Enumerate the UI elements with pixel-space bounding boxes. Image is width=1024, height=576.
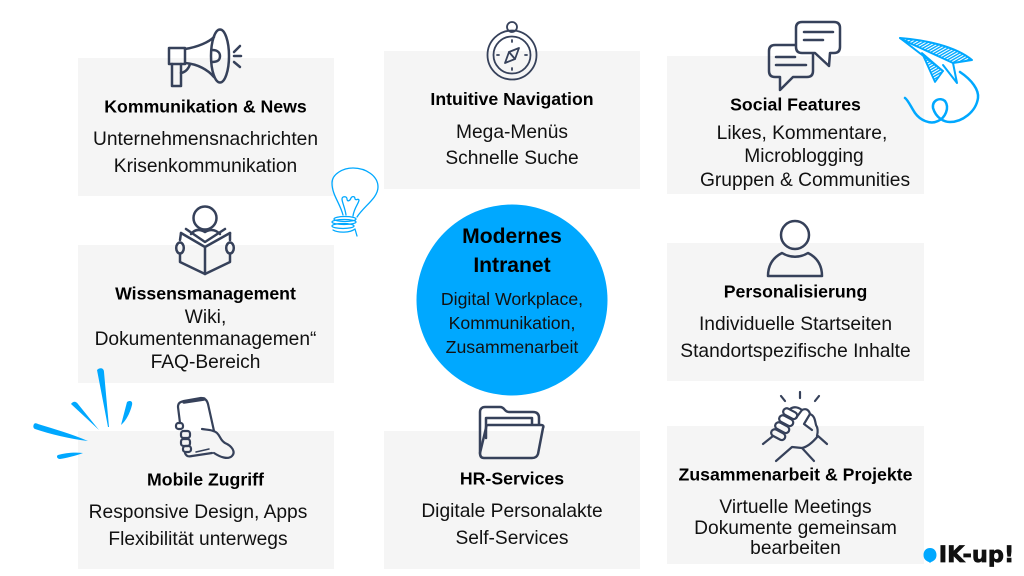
icon: handshake — [763, 392, 827, 461]
panel: Social Features — [667, 22, 924, 194]
panel: Personalisierung — [667, 221, 924, 381]
text block: Standortspezifische Inhalte — [680, 341, 911, 362]
heading: HR-Services — [460, 468, 564, 488]
heading: Intranet — [473, 254, 551, 277]
icon: paper plane doodle — [900, 38, 978, 122]
text block — [421, 501, 603, 549]
icon: person — [768, 221, 822, 276]
central circle: Modernes Intranet — [416, 204, 608, 396]
text block: Dokumentenmanagemen“ — [95, 329, 316, 350]
text block: Self-Services — [455, 528, 569, 549]
icon: light bulb doodle — [332, 168, 378, 236]
text block: Gruppen & Communities — [700, 170, 910, 191]
heading: Social Features — [730, 94, 861, 114]
logo dot — [924, 548, 936, 563]
text block — [95, 307, 316, 373]
text block: Individuelle Startseiten — [699, 314, 892, 335]
icon: hand holding phone — [176, 398, 234, 458]
panel: Intuitive Navigation — [384, 22, 640, 189]
text block: Digitale Personalakte — [421, 501, 603, 522]
panel: HR-Services — [384, 407, 640, 569]
text block — [694, 497, 897, 559]
icon: folder — [480, 407, 543, 458]
text block — [700, 123, 910, 191]
text block — [445, 122, 579, 169]
text block: Virtuelle Meetings — [719, 497, 872, 518]
text block: Likes, Kommentare, — [717, 123, 887, 144]
text block: Digital Workplace, — [441, 289, 583, 309]
text block: Responsive Design, Apps — [89, 502, 307, 523]
heading: Kommunikation & News — [104, 96, 307, 116]
text block: Mega-Menüs — [456, 122, 568, 143]
panel: Kommunikation & News — [78, 30, 334, 196]
text block — [441, 289, 583, 357]
heading: Wissensmanagement — [115, 284, 296, 304]
icon: megaphone — [169, 30, 241, 86]
heading: Modernes — [462, 225, 562, 248]
text block: bearbeiten — [750, 538, 841, 559]
text block: Krisenkommunikation — [114, 156, 297, 177]
icon: burst lines doodle — [33, 368, 132, 459]
icon: person reading book — [176, 206, 234, 274]
text block: Dokumente gemeinsam — [694, 518, 897, 539]
text block: Kommunikation, — [449, 313, 575, 333]
heading — [462, 225, 562, 277]
panel: Wissensmanagement — [78, 206, 334, 383]
text block: FAQ-Bereich — [151, 352, 260, 373]
text block: Wiki, — [185, 307, 226, 328]
heading: Intuitive Navigation — [430, 89, 594, 109]
text block: Flexibilität unterwegs — [108, 529, 288, 550]
text block — [93, 129, 318, 177]
text block — [89, 502, 307, 550]
text block: Schnelle Suche — [445, 148, 579, 169]
text block — [680, 314, 911, 362]
heading: Zusammenarbeit & Projekte — [679, 464, 913, 484]
heading: Personalisierung — [724, 282, 867, 302]
text block: Zusammenarbeit — [446, 337, 578, 357]
panel: Mobile Zugriff — [78, 398, 334, 569]
logo text: IK-up! — [939, 542, 1014, 568]
text block: Unternehmensnachrichten — [93, 129, 318, 150]
text block: Microblogging — [744, 146, 864, 167]
logo: IK-up! — [924, 542, 1014, 568]
icon: speech bubbles — [769, 22, 840, 90]
heading: Mobile Zugriff — [147, 470, 264, 490]
icon: compass — [488, 22, 536, 80]
panel: Zusammenarbeit & Projekte — [667, 392, 924, 564]
